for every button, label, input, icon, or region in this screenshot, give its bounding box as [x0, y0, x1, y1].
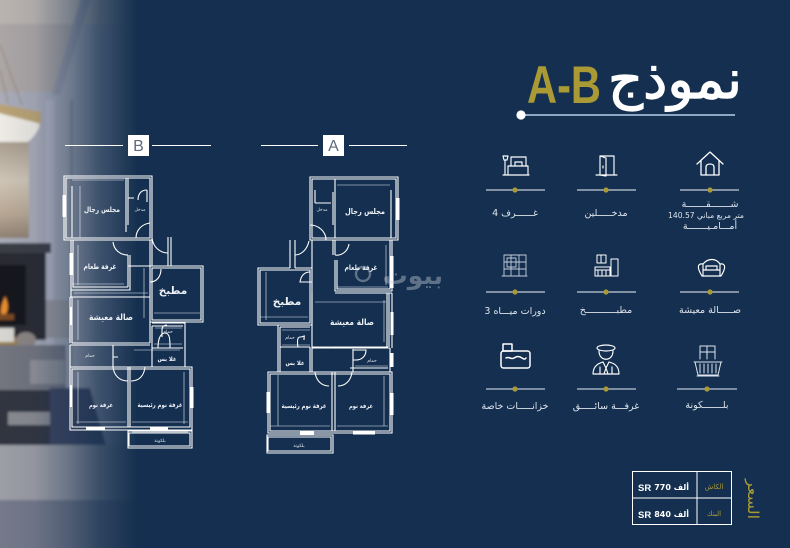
- room labels B: غرفة طعام: [84, 262, 116, 271]
- label: four rooms: 4 غــــــرف: [492, 208, 538, 219]
- room labels A: حمام: [285, 336, 295, 341]
- icon: kitchen: [595, 255, 618, 276]
- divider: bathrooms: [486, 289, 545, 295]
- watermark: Bayut logo: بيوت: [383, 261, 443, 291]
- room labels A: مجلس رجال: [345, 207, 385, 217]
- divider: apartment: [680, 187, 739, 193]
- price row: bank: البنك: [707, 510, 721, 518]
- divider: private tanks: [486, 386, 545, 392]
- room labels A: مدخل: [317, 208, 328, 213]
- icon: house: [697, 152, 723, 175]
- doors A: [295, 225, 366, 386]
- room labels B: [84, 205, 187, 444]
- divider: driver room: [577, 386, 636, 392]
- walls B: [64, 176, 152, 240]
- divider: rooms: [486, 187, 545, 193]
- room labels B: بلكونة: [154, 438, 166, 444]
- label: balcony: بلـــــــكونة: [685, 400, 729, 411]
- watermark: Bayut logo: [356, 261, 443, 291]
- room labels A: صالة معيشة: [330, 318, 374, 328]
- label: private tanks: خزانـــــات خاصة: [481, 401, 549, 412]
- price heading vertical: السعر: [744, 478, 762, 519]
- divider: kitchen: [577, 289, 636, 295]
- label: living hall: صـــــالة معيشة: [679, 305, 741, 316]
- room labels B: غلا بس: [158, 356, 176, 363]
- price row: bank: 840 ألف: [654, 509, 689, 519]
- plan heading B: B: [133, 138, 144, 155]
- price row: bank: [638, 509, 721, 521]
- background photo: living room interior: [0, 0, 145, 548]
- icon: water tank: [501, 344, 530, 368]
- label: apartment details: شـــــــقـــــــة: [682, 199, 738, 210]
- divider: living hall: [680, 289, 739, 295]
- windows B: [64, 195, 192, 428]
- room labels A: غرفة طعام: [344, 263, 378, 272]
- icon: door: [596, 156, 617, 176]
- divider: entrances: [577, 187, 636, 193]
- title underline with dot: [516, 110, 735, 120]
- room labels B: مجلس رجال: [84, 205, 120, 214]
- room labels A: غرفة نوم: [349, 403, 373, 410]
- plan heading B: [65, 135, 211, 156]
- price row: cash: 770 ألف: [654, 482, 689, 492]
- room labels A: حمام: [367, 359, 377, 364]
- divider: balcony: [677, 386, 737, 392]
- icon: sofa: [698, 260, 725, 276]
- room labels A: بلكونة: [293, 443, 305, 449]
- room labels B: حمام: [85, 354, 95, 359]
- title: model A-B: [527, 48, 742, 115]
- label: apartment details: [668, 199, 744, 232]
- price row: bank: SR: [638, 510, 651, 521]
- walls A: [310, 177, 398, 240]
- icon: bed and lamp: [503, 156, 529, 175]
- label: apartment details: 140.57 متر مربع مباني: [668, 211, 744, 220]
- label: apartment details: أمـــامـيـــــــة: [683, 219, 737, 232]
- plan heading A: [261, 135, 407, 156]
- label: kitchen: مطبـــــــــــخ: [580, 305, 632, 316]
- price row: cash: SR: [638, 483, 651, 494]
- title arabic word: نموذج: [608, 48, 742, 111]
- room labels B: غرفة نوم: [89, 402, 113, 409]
- room labels B: صالة معيشة: [89, 313, 133, 323]
- room labels B: حمام: [163, 330, 173, 335]
- floor plan A: [258, 177, 398, 453]
- price row: cash: الكاش: [705, 483, 723, 491]
- room labels B: مدخل: [135, 208, 146, 213]
- floor plan B: [64, 176, 203, 448]
- room labels A: مطبخ: [273, 296, 301, 308]
- room labels B: مطبخ: [159, 285, 187, 297]
- room labels B: غرفة نوم رئيسية: [138, 401, 182, 409]
- title gold letters: A-B: [527, 56, 601, 115]
- label: two entrances: مدخـــــلين: [584, 208, 628, 219]
- plan heading A: A: [328, 138, 339, 155]
- icon: bathrooms: [502, 255, 527, 276]
- doors B: [113, 190, 170, 381]
- label: driver room: غرفـــة سائـــــق: [573, 401, 639, 412]
- room labels A: غلا بس: [286, 360, 304, 367]
- dimension lines A: [260, 185, 390, 437]
- price table: [632, 471, 732, 525]
- label: three bathrooms: 3 دورات ميـــاه: [484, 306, 546, 317]
- dimension lines B: [72, 180, 200, 432]
- price row: cash: [638, 482, 723, 494]
- room labels A: [273, 207, 385, 449]
- room labels A: غرفة نوم رئيسية: [282, 402, 326, 410]
- icon: driver: [593, 345, 619, 374]
- windows A: [268, 198, 398, 433]
- icon: balcony: [694, 346, 722, 376]
